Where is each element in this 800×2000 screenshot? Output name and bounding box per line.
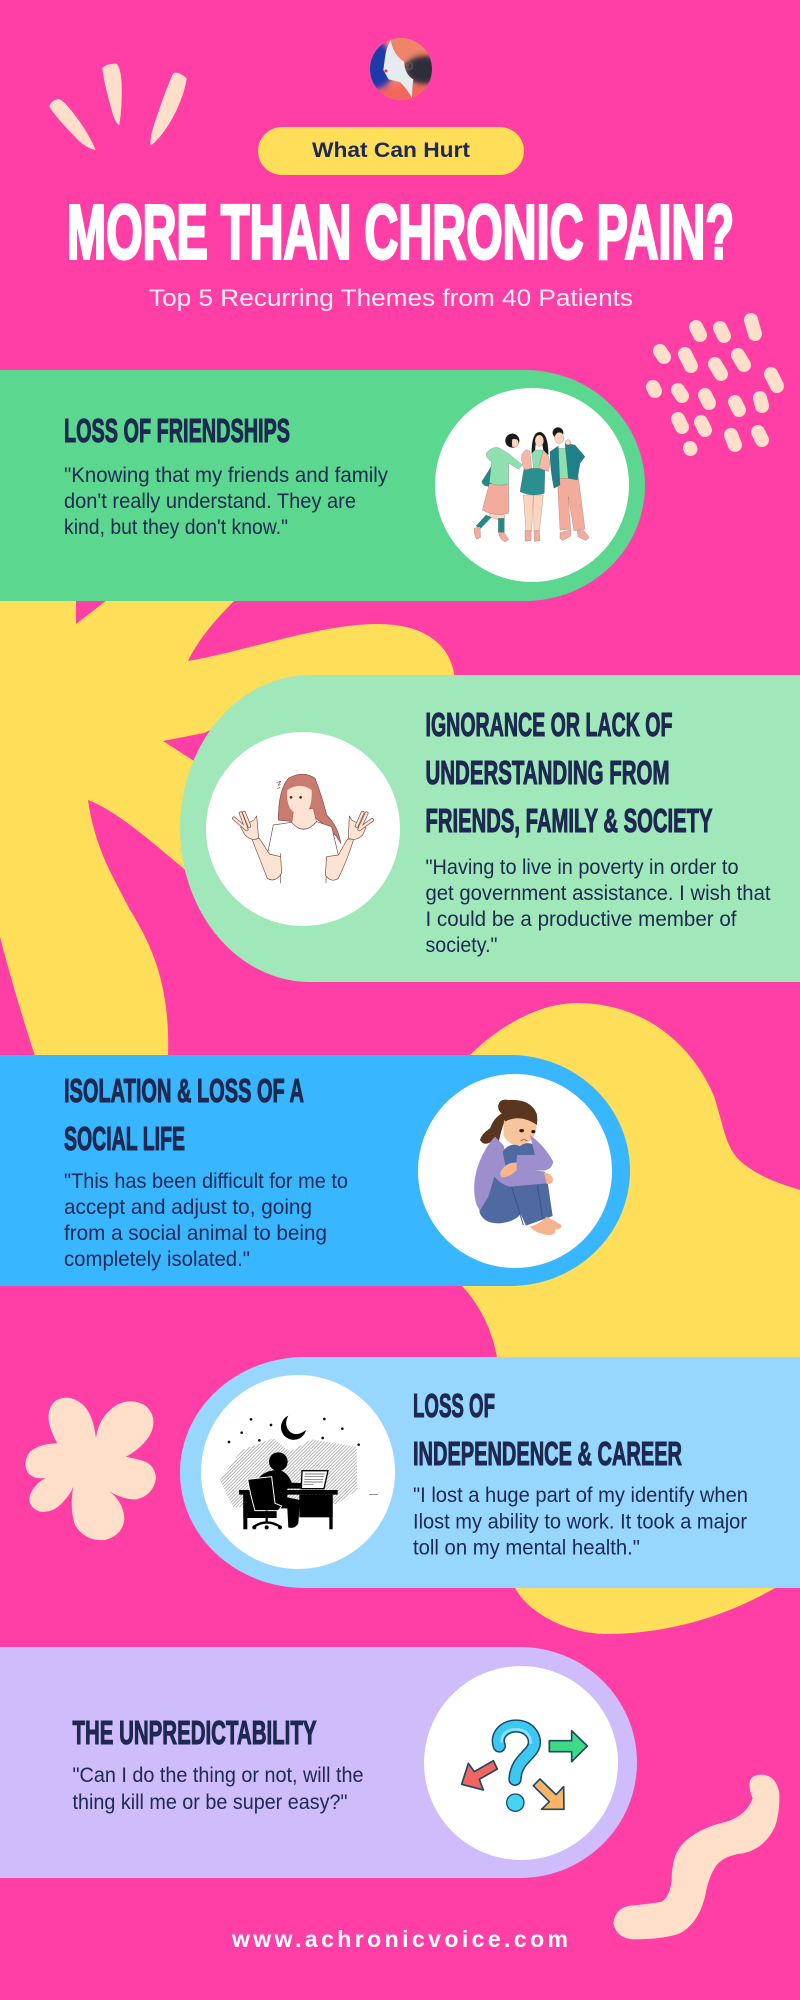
panel: loss of independence and career [180,1357,800,1588]
quote: friends: kind, but they don't know." [64,516,288,539]
quote: social animal: from a social animal to being [64,1222,327,1245]
panel: the unpredictability [0,1647,637,1878]
quote: poverty: "Having to live in poverty in order to [426,856,738,879]
heading: loss of friendships: LOSS OF FRIENDSHIPS [64,412,290,449]
decorative yellow blob right [440,1003,800,1634]
badge: What Can Hurt: What Can Hurt [312,139,470,162]
logo [370,38,432,100]
image circle: friends [435,388,629,582]
decorative squiggle [613,1775,779,1939]
panel: ignorance or lack of understanding [180,675,800,982]
heading: isolation [64,1072,304,1157]
heading: isolation: ISOLATION & LOSS OF A [64,1072,304,1109]
icon: question mark with arrows [462,1726,587,1811]
quote: friends: don't really understand. They are [64,490,356,513]
decorative capsule dots [653,320,777,449]
quote: friends: "Knowing that my friends and family [64,464,388,487]
quote: social animal: completely isolated." [64,1248,250,1271]
quote: social animal: "This has been difficult for me to [64,1170,348,1193]
icon: person working at desk at night [220,1416,378,1529]
image circle: desk [201,1375,395,1569]
image circle: woman [206,732,400,926]
heading: ignorance [426,706,712,839]
quote: social animal [64,1170,348,1271]
quote: poverty [426,856,771,957]
decorative flower [25,1398,156,1540]
quote: poverty: I could be a productive member of [426,908,737,931]
heading: isolation: SOCIAL LIFE [64,1120,185,1157]
footer url: www.achronicvoice.com [231,1926,568,1952]
decorative spikes [49,63,187,150]
quote: identity [413,1484,748,1560]
quote: identity: Ilost my ability to work. It took a major [413,1510,747,1534]
badge: What Can Hurt [258,127,524,175]
icon: sad girl hugging knees [474,1100,562,1235]
icon: shrugging woman [234,774,372,883]
quote: the thing: thing kill me or be super easy?" [72,1791,348,1814]
heading: independence [413,1387,682,1472]
quote: the thing: "Can I do the thing or not, will the [72,1764,364,1787]
panel: loss of friendships [0,370,645,601]
decorative yellow blob left [0,600,455,1056]
subtitle: Top 5 Recurring Themes from 40 Patients [149,285,633,312]
quote: social animal: accept and adjust to, going [64,1196,312,1219]
quote: the thing [72,1764,364,1814]
icon: three friends [474,427,589,542]
panel: isolation and loss of a social life [0,1055,630,1286]
quote: identity: "I lost a huge part of my identify when [413,1484,748,1507]
heading: independence: LOSS OF [413,1387,495,1424]
image circle: question mark [424,1666,618,1860]
quote: identity: toll on my mental health." [413,1536,640,1560]
image circle: girl [418,1074,612,1268]
quote: poverty: get government assistance. I wish that [426,882,771,905]
quote: friends [64,464,388,539]
quote: poverty: society." [426,934,498,957]
heading: unpredictability: THE UNPREDICTABILITY [72,1714,316,1751]
